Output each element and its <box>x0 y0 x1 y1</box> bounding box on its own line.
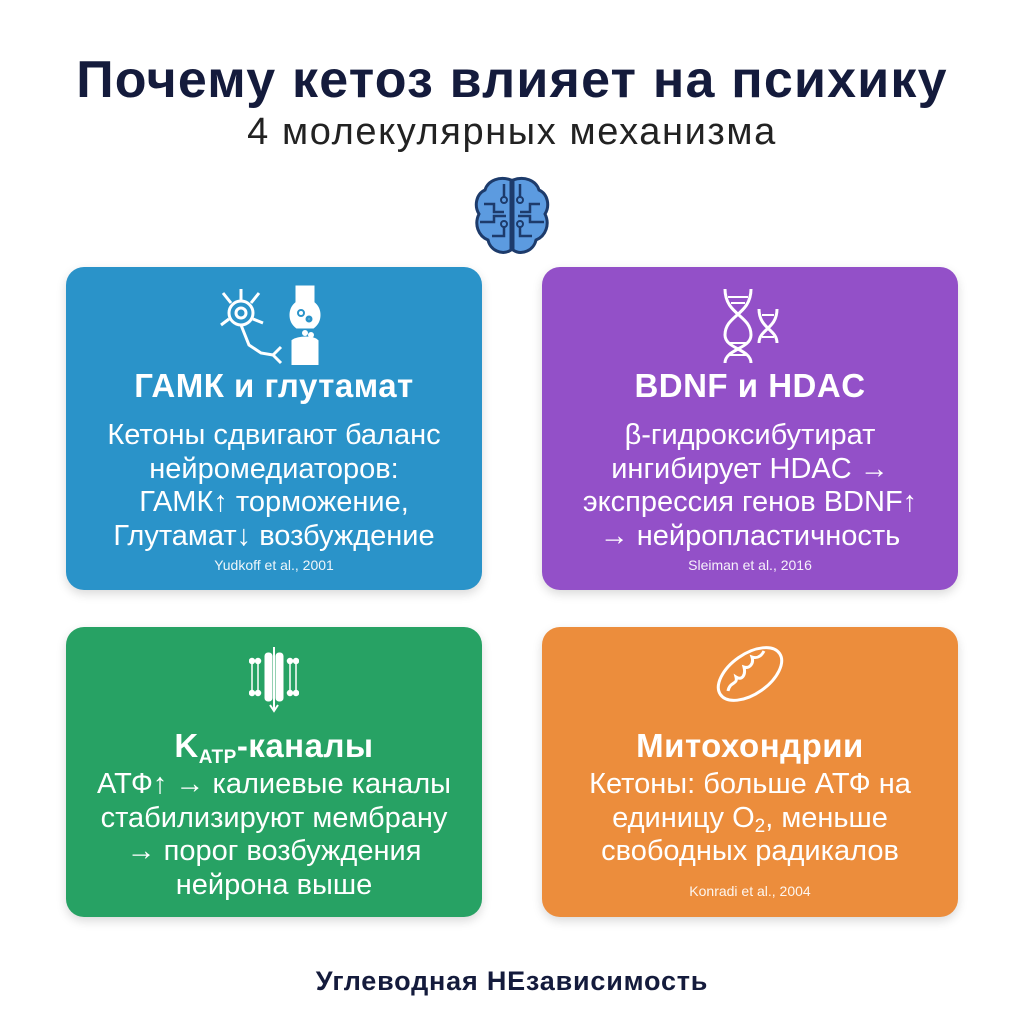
body text: β-гидроксибутират <box>625 419 875 451</box>
body text <box>97 768 451 900</box>
icon: DNA <box>724 289 778 363</box>
footer brand: Углеводная НЕзависимость <box>316 966 708 996</box>
body text <box>589 768 911 867</box>
body text: ингибирует HDAC → <box>611 452 889 484</box>
heading: BDNF и HDAC <box>634 367 866 404</box>
body text: нейромедиаторов: <box>149 452 399 484</box>
body text: → порог возбуждения <box>127 835 421 867</box>
body text <box>107 419 441 552</box>
body text: Кетоны: больше АТФ на <box>589 768 911 800</box>
citation: Sleiman et al., 2016 <box>688 557 812 573</box>
body text: единицу O2, меньше <box>612 802 888 837</box>
icon: brain <box>474 176 550 254</box>
body text: Глутамат↓ возбуждение <box>113 520 435 552</box>
citation: Yudkoff et al., 2001 <box>214 557 334 573</box>
citation: Konradi et al., 2004 <box>689 883 811 899</box>
body text <box>583 419 917 552</box>
body text: Кетоны сдвигают баланс <box>107 419 441 451</box>
body text: экспрессия генов BDNF↑ <box>583 486 917 518</box>
icon: membrane channel <box>249 647 299 713</box>
panel: BDNF HDAC <box>542 267 958 590</box>
panel: KATP channels <box>66 627 482 917</box>
body text: → нейропластичность <box>600 520 900 552</box>
icon: mitochondrion <box>716 646 784 702</box>
panel: GABA glutamate <box>66 267 482 590</box>
title: Почему кетоз влияет на психику <box>76 51 948 109</box>
subtitle: 4 молекулярных механизма <box>247 111 777 153</box>
body text: ГАМК↑ торможение, <box>139 486 409 518</box>
body text: нейрона выше <box>176 868 372 900</box>
heading: Митохондрии <box>636 727 864 764</box>
body text: АТФ↑ → калиевые каналы <box>97 768 451 800</box>
icon: neuron synapse <box>220 286 320 365</box>
panel: mitochondria <box>542 627 958 917</box>
body text: стабилизируют мембрану <box>101 802 447 834</box>
heading: KATP-каналы <box>174 727 374 768</box>
body text: свободных радикалов <box>601 835 899 867</box>
heading: ГАМК и глутамат <box>134 367 414 404</box>
